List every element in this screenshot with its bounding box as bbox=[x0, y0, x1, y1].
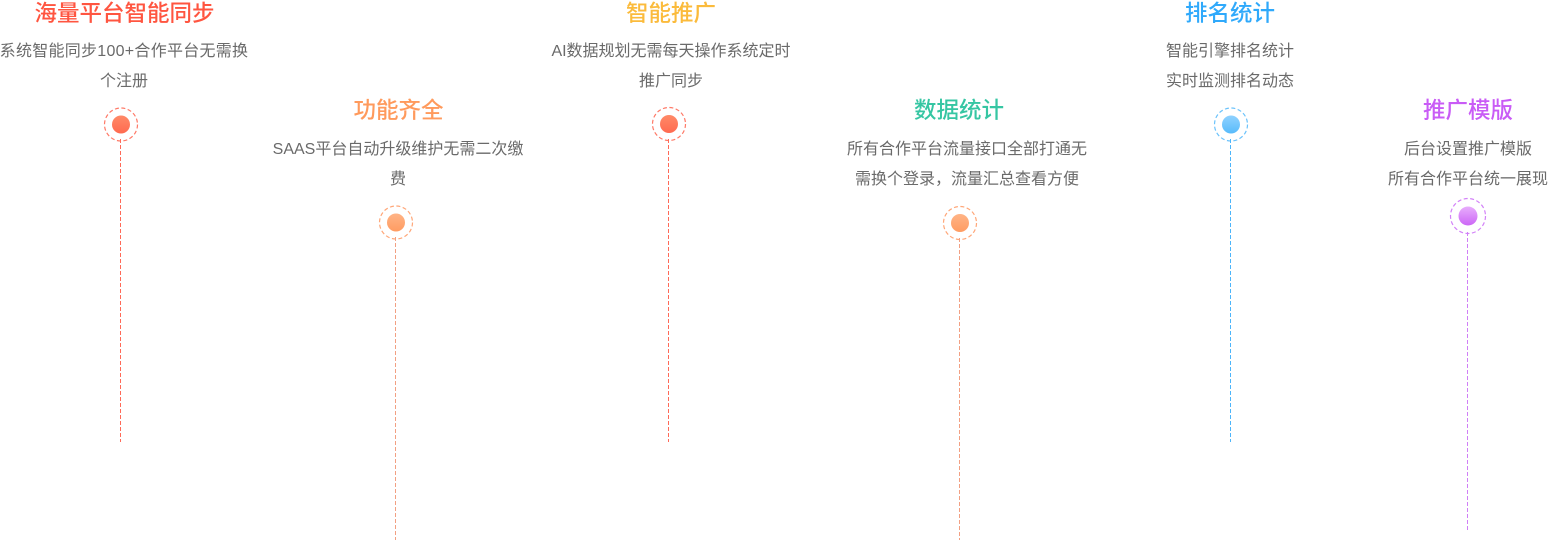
column: 数据统计 bbox=[847, 98, 1087, 188]
marker 3 bbox=[652, 108, 686, 442]
description line 2: 需换个登录，流量汇总查看方便 bbox=[855, 171, 1079, 188]
description line 2: 实时监测排名动态 bbox=[1166, 73, 1294, 90]
marker 2 bbox=[380, 206, 412, 540]
description line 2: 所有合作平台统一展现 bbox=[1388, 171, 1548, 188]
description line 2: 费 bbox=[390, 171, 406, 188]
description line 1: SAAS平台自动升级维护无需二次缴 bbox=[273, 141, 523, 158]
heading: 推广模版 bbox=[1423, 98, 1513, 123]
description line 1: 系统智能同步100+合作平台无需换 bbox=[0, 43, 248, 60]
heading: 智能推广 bbox=[626, 1, 716, 26]
marker 1 bbox=[104, 108, 138, 442]
description line 1: AI数据规划无需每天操作系统定时 bbox=[551, 43, 791, 60]
column: 推广模版 bbox=[1388, 98, 1548, 188]
column: 排名统计 bbox=[1166, 1, 1294, 90]
description line 1: 后台设置推广模版 bbox=[1404, 141, 1532, 158]
heading: 排名统计 bbox=[1185, 1, 1275, 26]
column: 功能齐全 bbox=[273, 98, 523, 188]
description line 1: 所有合作平台流量接口全部打通无 bbox=[847, 141, 1087, 158]
column: 智能推广 bbox=[551, 1, 791, 90]
heading: 功能齐全 bbox=[353, 98, 444, 123]
description line 1: 智能引擎排名统计 bbox=[1166, 43, 1294, 60]
heading: 数据统计 bbox=[914, 98, 1004, 123]
marker 5 bbox=[1214, 108, 1248, 442]
description line 2: 推广同步 bbox=[639, 73, 703, 90]
column: 海量平台智能同步 bbox=[0, 1, 248, 90]
description line 2: 个注册 bbox=[100, 73, 148, 90]
marker 6 bbox=[1450, 198, 1486, 532]
marker 4 bbox=[944, 206, 976, 540]
heading: 海量平台智能同步 bbox=[34, 1, 215, 26]
